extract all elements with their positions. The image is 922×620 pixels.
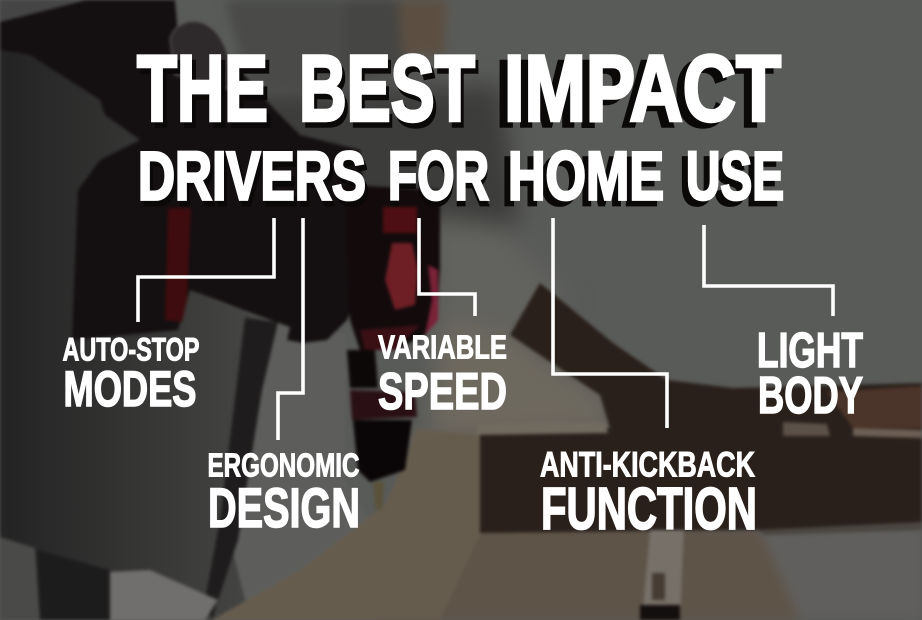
- title shadow: HOME: [502, 143, 658, 220]
- label: variable speed: SPEED: [378, 363, 507, 421]
- connector: anti-kickback function: [553, 218, 667, 428]
- label: auto-stop modes: AUTO-STOP: [62, 332, 200, 368]
- title line 1: [137, 36, 781, 140]
- label: ergonomic design: ERGONOMIC: [208, 446, 360, 484]
- connector: variable speed: [419, 218, 475, 316]
- dark fold: [205, 318, 278, 620]
- label: auto-stop modes: MODES: [64, 361, 196, 417]
- title line 2: USE: [686, 138, 784, 215]
- lower shirt: [0, 537, 40, 620]
- title shadow: [141, 41, 778, 220]
- title: [137, 36, 784, 220]
- label: light body: [757, 324, 863, 425]
- title shadow: IMPACT: [496, 41, 773, 146]
- title line 2: DRIVERS: [138, 138, 366, 215]
- label: auto-stop modes: [62, 332, 200, 417]
- connector: auto-stop modes: [138, 218, 274, 322]
- title line 1: BEST: [299, 36, 475, 140]
- shirt: [0, 50, 345, 620]
- label: anti-kickback function: [540, 446, 757, 542]
- watch: [170, 21, 232, 90]
- title line 2: [138, 138, 784, 215]
- title line 1: THE: [137, 36, 268, 140]
- wood floor wedge: [212, 430, 480, 620]
- title shadow: THE: [141, 41, 272, 146]
- label: ergonomic design: DESIGN: [208, 476, 360, 539]
- post: [642, 530, 684, 620]
- connector: light body: [704, 225, 833, 316]
- connector: ergonomic design: [278, 218, 303, 440]
- red grip strip: [165, 208, 191, 322]
- title line 2: HOME: [508, 138, 664, 215]
- label: variable speed: VARIABLE: [378, 328, 507, 366]
- title shadow: BEST: [302, 41, 478, 146]
- arm and hand: [0, 0, 365, 343]
- drill body: [345, 185, 440, 350]
- title shadow: DRIVERS: [141, 143, 369, 220]
- label: light body: BODY: [758, 367, 863, 425]
- dark forearm band and box: [480, 283, 922, 533]
- label: light body: LIGHT: [757, 324, 863, 378]
- label: variable speed: [378, 328, 507, 421]
- title shadow: USE: [680, 143, 778, 220]
- label: anti-kickback function: ANTI-KICKBACK: [540, 446, 755, 484]
- label: anti-kickback function: FUNCTION: [541, 476, 757, 542]
- title line 2: FOR: [388, 138, 489, 215]
- label: ergonomic design: [208, 446, 360, 539]
- title shadow: FOR: [388, 143, 489, 220]
- wood right side: [757, 525, 922, 620]
- title line 1: IMPACT: [504, 36, 781, 140]
